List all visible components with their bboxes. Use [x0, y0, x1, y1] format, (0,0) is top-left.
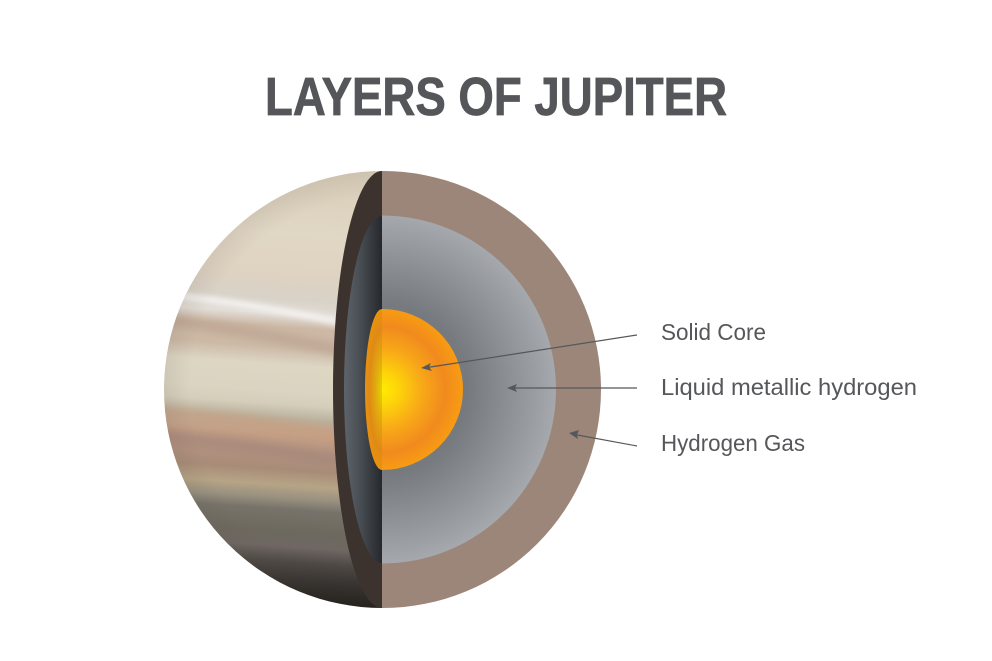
layer: solid core	[365, 309, 463, 470]
planet outer surface with cloud bands	[164, 171, 382, 608]
title: LAYERS OF JUPITER	[265, 67, 727, 127]
label: liquid metallic hydrogen: Liquid metallic hydrogen	[661, 374, 917, 400]
label: hydrogen gas: Hydrogen Gas	[661, 430, 805, 456]
cut face: metallic hydrogen shaded side	[344, 216, 382, 563]
layer: liquid metallic hydrogen	[382, 216, 556, 564]
label: solid core: Solid Core	[661, 319, 766, 345]
cut face: dark shell	[333, 171, 382, 608]
arrow: hydrogen gas	[572, 434, 637, 446]
layer: hydrogen gas	[382, 171, 601, 608]
arrow: liquid metallic hydrogen	[510, 387, 637, 389]
arrowhead: solid core	[421, 363, 432, 371]
arrow: solid core	[424, 335, 637, 368]
arrowhead: liquid metallic hydrogen	[507, 384, 517, 392]
jupiter cutaway diagram	[164, 171, 601, 608]
infographic canvas	[164, 77, 916, 608]
arrowhead: hydrogen gas	[569, 430, 579, 439]
